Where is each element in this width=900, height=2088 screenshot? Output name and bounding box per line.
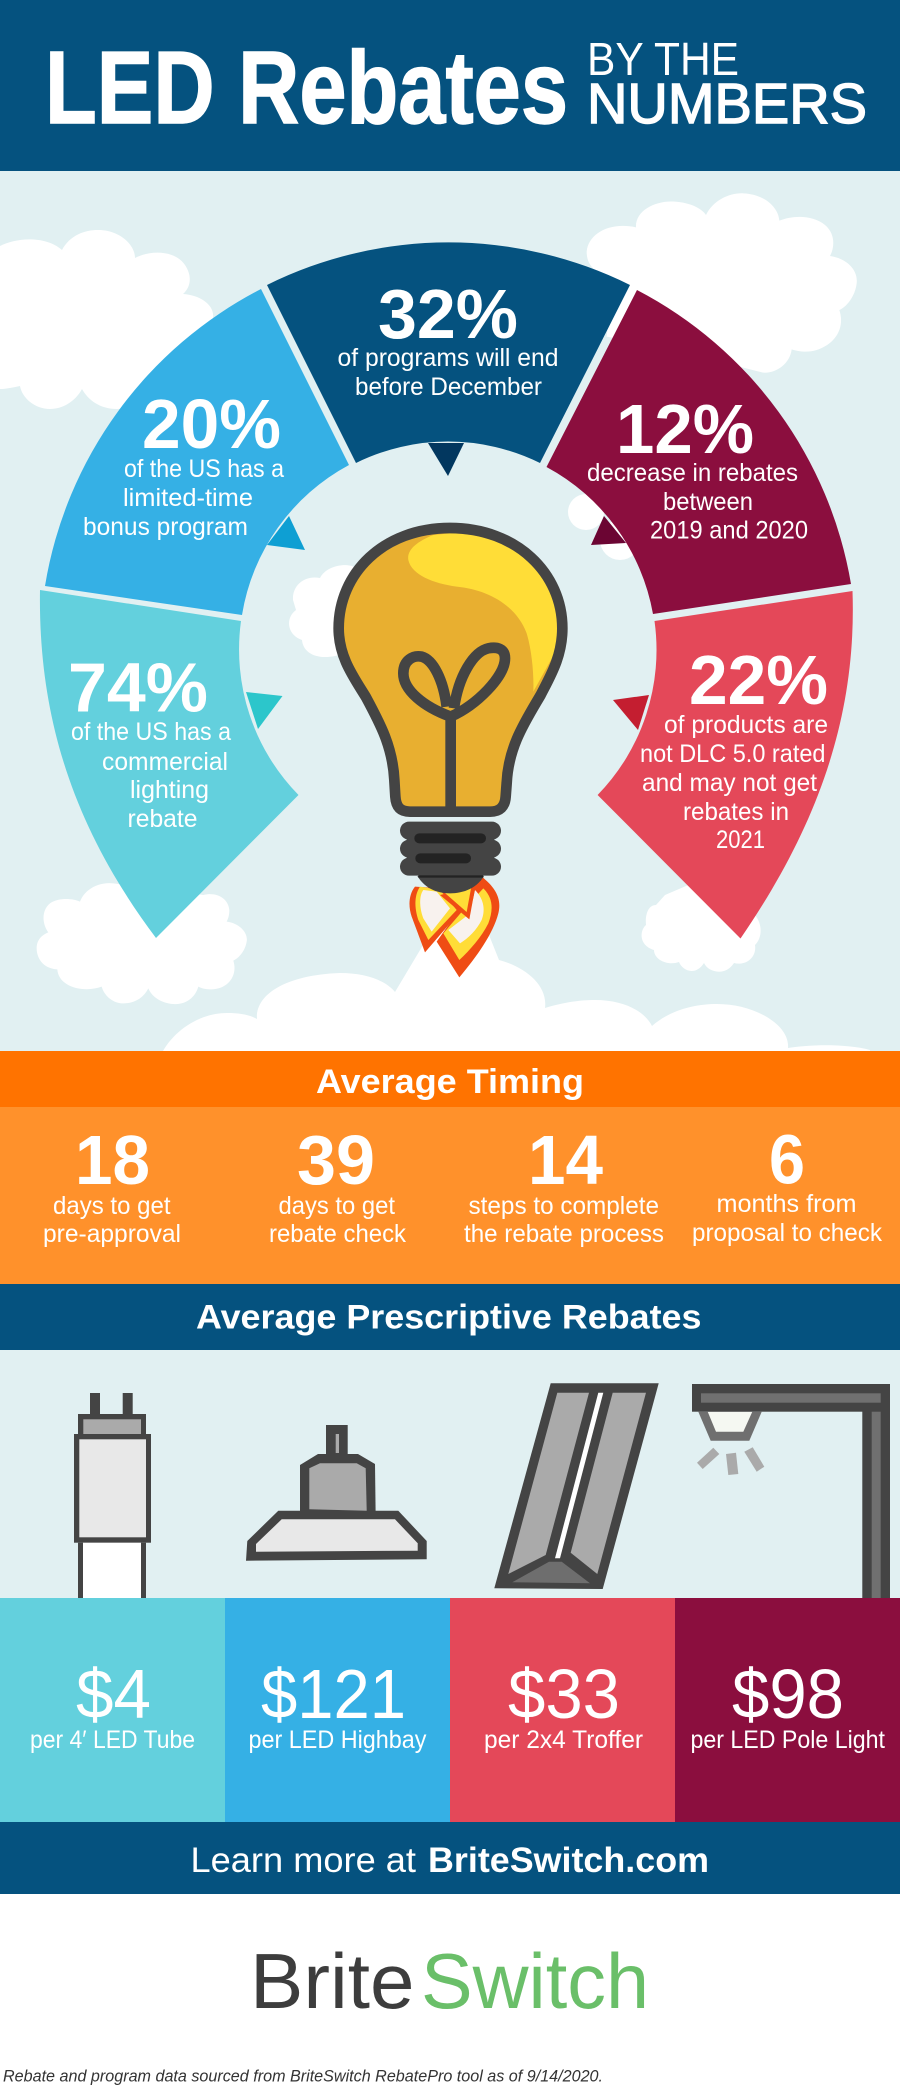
tile: $98 per LED pole light <box>675 1598 900 1822</box>
cloud: behind maroon segment <box>568 494 640 560</box>
stat: 39 days: rebate check <box>269 1220 406 1248</box>
tile: $4 per LED tube: $4 <box>76 1655 151 1733</box>
panel: 32% programs ending: 32% <box>378 275 518 353</box>
panel: 12% decrease in rebates: decrease in rebates <box>587 459 798 487</box>
panel: 22% not DLC rated: not DLC 5.0 rated <box>640 740 826 768</box>
call to action banner: Learn more at <box>190 1841 416 1880</box>
sky panel background <box>0 171 900 1051</box>
panel: 32% programs ending: of programs will end <box>338 344 558 372</box>
tile: $33 per 2x4 troffer: $33 <box>508 1655 620 1733</box>
subtitle: by the numbers <box>587 33 867 136</box>
tile: $33 per 2x4 troffer: per 2x4 Troffer <box>484 1726 643 1754</box>
icon: rocket light bulb <box>339 528 562 977</box>
cloud: top left <box>0 230 213 409</box>
tile: $98 per LED pole light: $98 <box>732 1655 844 1733</box>
footnote: Rebate and program data sourced from BriteSwitch RebatePro tool as of 9/14/2020. <box>3 2066 603 2086</box>
panel: 74% commercial lighting rebate: of the US has a <box>71 718 231 746</box>
filament <box>403 648 505 808</box>
panel: 74% commercial lighting rebate: lighting <box>130 776 209 804</box>
stat: 39 days <box>269 1121 406 1248</box>
icons panel background <box>0 1350 900 1598</box>
panel: 12% decrease in rebates: 12% <box>616 390 754 468</box>
tile: $121 per LED highbay <box>225 1598 450 1822</box>
section: average timing <box>0 1051 900 1284</box>
cloud: behind bulb <box>289 565 360 657</box>
logo: BriteSwitch: Switch <box>421 1937 649 2025</box>
bulb glass <box>339 528 562 812</box>
section heading: average prescriptive rebates <box>0 1284 900 1350</box>
bulb outline <box>339 528 562 812</box>
panel: 22% not DLC rated: rebates in <box>683 798 789 826</box>
cloud: lower right <box>642 880 761 972</box>
stat: 6 months: 6 <box>769 1120 805 1198</box>
tile: $121 per LED highbay: $121 <box>261 1655 406 1733</box>
panel: 74% commercial lighting rebate: rebate <box>128 805 198 833</box>
panel: 12% decrease in rebates: between <box>663 488 753 516</box>
call to action banner <box>0 1822 900 1894</box>
arc fold triangles <box>246 443 649 730</box>
tile: $98 per LED pole light: per LED Pole Light <box>690 1726 885 1754</box>
panel: 32% programs ending: before December <box>355 373 542 401</box>
stat: 18 days <box>43 1121 181 1248</box>
tile: $4 per LED tube: per 4′ LED Tube <box>30 1726 195 1754</box>
call to action banner: BriteSwitch.com <box>428 1841 709 1880</box>
cloud: smoke under rocket <box>163 930 870 1051</box>
panel: 32% programs ending <box>267 242 630 463</box>
stat: 39 days: days to get <box>278 1192 395 1220</box>
stat: 14 steps: the rebate process <box>464 1220 664 1248</box>
heading: average timing: Average Timing <box>316 1063 584 1101</box>
rocket flames <box>409 877 499 977</box>
panel: 22% not DLC rated: 22% <box>689 641 828 719</box>
icon: LED pole light <box>692 1384 890 1598</box>
panel: 74% commercial lighting rebate <box>40 590 298 938</box>
panel: 20% limited-time bonus program: of the US has a <box>124 455 284 483</box>
tile: $33 per 2x4 troffer <box>450 1598 675 1822</box>
stat: 14 steps: steps to complete <box>468 1192 659 1220</box>
screw base <box>400 822 501 893</box>
title: LED Rebates <box>45 30 568 145</box>
cloud: lower left <box>37 883 247 1004</box>
stat: 18 days: days to get <box>53 1192 171 1220</box>
stat: 18 days: 18 <box>75 1121 150 1199</box>
stat: 39 days: 39 <box>297 1121 375 1199</box>
subtitle: by the numbers: BY THE <box>587 33 739 85</box>
stat: 14 steps: 14 <box>528 1121 603 1199</box>
panel: 12% decrease in rebates: 2019 and 2020 <box>650 516 808 544</box>
panel: 22% not DLC rated: of products are <box>664 711 828 739</box>
stat: 6 months: months from <box>716 1190 856 1218</box>
logo: BriteSwitch <box>250 1937 649 2025</box>
tile: $4 per LED tube <box>0 1598 225 1822</box>
panel: 20% limited-time bonus program: bonus program <box>83 513 248 541</box>
logo: BriteSwitch: Brite <box>250 1937 414 2025</box>
panel: 20% limited-time bonus program: limited-time <box>123 484 253 512</box>
stat: 18 days: pre-approval <box>43 1220 181 1248</box>
stat: 6 months: proposal to check <box>692 1219 882 1247</box>
subtitle: by the numbers: NUMBERS <box>587 72 867 136</box>
icon: LED tube <box>74 1393 151 1598</box>
bulb highlight <box>408 533 558 692</box>
tile: $121 per LED highbay: per LED Highbay <box>248 1726 427 1754</box>
panel: 74% commercial lighting rebate: 74% <box>68 648 208 726</box>
panel: 12% decrease in rebates <box>546 290 851 614</box>
panel: 20% limited-time bonus program <box>45 289 349 615</box>
cloud: top right <box>587 193 857 373</box>
icon: LED highbay <box>246 1425 427 1561</box>
panel: 22% not DLC rated: and may not get <box>642 769 817 797</box>
header banner <box>0 0 900 171</box>
panel: 22% not DLC rated <box>598 591 853 938</box>
icon: 2x4 troffer <box>494 1383 659 1589</box>
panel: 74% commercial lighting rebate: commercial <box>102 748 228 776</box>
panel: 20% limited-time bonus program: 20% <box>142 385 281 463</box>
panel: 22% not DLC rated: 2021 <box>716 826 765 854</box>
section heading: average prescriptive rebates: Average Prescriptive Rebates <box>196 1298 702 1336</box>
stat: 14 steps <box>464 1121 664 1248</box>
stat: 6 months <box>692 1120 882 1247</box>
